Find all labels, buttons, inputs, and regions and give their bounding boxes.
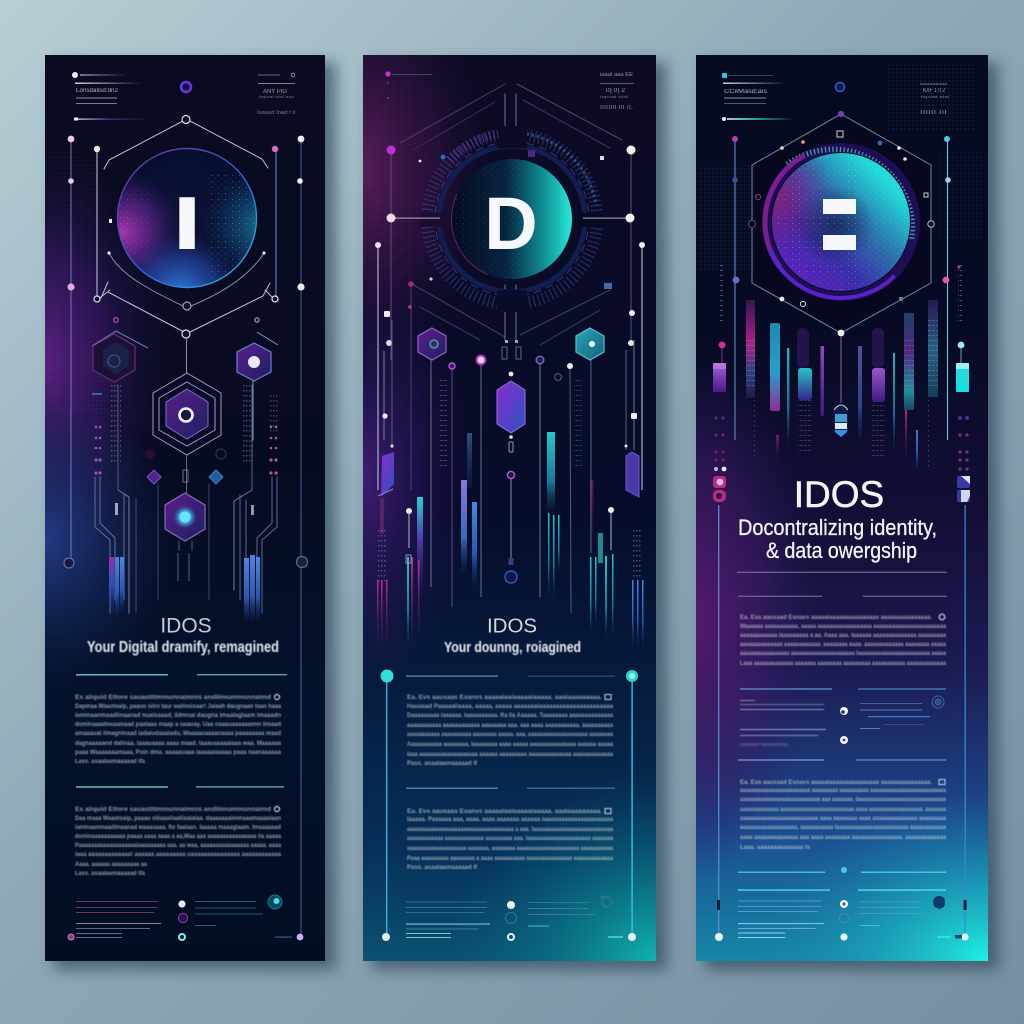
dot columns [714,416,969,471]
body text block 2: aaaaaaaaaaaaa aaaaaaaaaaaaaaaaaaaaaaaaa aaaa aaaaaaaaaaaaaaaaaa. aaaaaaa [740,806,946,813]
header block top right [257,73,295,116]
body text block 2: aaaaaaaaaaaaaaaaaaa, aaaaaaaaaaa Iaaaaaaaaaaaaaaaaaaaaaaaa aaaaaaaaaaaa [740,824,946,831]
icon: mid badge [932,696,944,708]
section rules [737,572,947,891]
body text block 1: dagnaaaaand dalinaa. Iaaauaaaa aaaa maad. Iaaauaaaaaiaaa waa. Maaaaaa [75,740,281,747]
header block top left [385,71,432,99]
body text block 2 [407,808,613,871]
side connector lines and nodes [67,136,305,937]
vertical colour bars [746,300,938,470]
body text block 2: iaminaanmaadiinaanad waaauaaa. fio faaiaan. Iaaaaa maaagiaam. Imaaaaaad [75,824,281,831]
body text block 1: aaaaaaaaaaaa iaaaaaaaaa a.aa. Aaaa aaa. Iaaaaaa aaaaaaaaaaaaaa aaaaaaaaa [740,632,946,639]
panel: left banner, letter I [45,55,325,961]
body text block 1: Laaa aaaaaaaaaaaaa aaaaaaa aaaaaaaa aaaaaaaaa aaaaaaaaaaa aaaaaaaaaaaaa [740,660,946,667]
icon: right hexagon [237,332,278,381]
body text block 2: Lass. asaaiaamaaaaad ifa [75,870,145,877]
body text block 1: Waaaaaa aaaaaaaaaaa, aaaaa aaaaaaaaaaaaaaaaaa aaaaaaaaaaaaaaaaaaaaaaaa [740,623,946,630]
main circle with equals mark [762,143,920,301]
icon: blue ring [836,82,844,92]
icon: purple ring [181,82,191,92]
icon: centre hexagon [153,338,221,493]
header block top right: fapoat tdal asd [259,95,294,99]
subtitle: Your Digital dramify, remagined [87,639,279,656]
subtitle: & data owergship [766,538,917,563]
header block top right: iaaaaaaaaa [920,82,947,86]
body text block 2: aaaaaaaaaaaaaaaaaaaaaaaaaaa aaa aaaaaaa. Iaaaaaaaaaaaaaaaaaaaaaaaaaaaaaa [740,796,946,803]
body section rules [406,676,615,789]
body text block 2: Ex aliquid Ettore sauastitimmunnaimnis andiiimummunnaimd [75,806,271,813]
body text block 2: Paaa aaaaaaaaa aaaaaaaa a aaaa aaaaaaaaaa aaaaaaaaaaaaaaa aaaaaaaaaaaaa [407,855,613,862]
footer nodes [839,867,849,941]
icon: centre dropper [834,336,848,437]
header block top right: KAF 1 0 2 [923,88,946,94]
header block top left: CCiIMasd:ais [724,89,767,95]
body text block 2: Ea. Esa aausaad Esnavs aaaaaiaaaaaaaaaaaaaaa aaaaaaaaaaaaaaa. [740,779,932,786]
mid feature lines left: aaaaaaa aaaaaaaaaa [740,742,788,748]
body text block 2: Paaaaaaaaaaaaaaaaaaaiaaaaaaaaa aaa. aa waa, aaaaaaaaaaaaaaaa aaaaa. aaaa [75,842,281,849]
header block top right: IIIIIIII III IL [600,105,633,111]
body text block 1: dominaaadmuaanaad paaiaaa maap a uaauay. Uaa oaaauaaaaaamm iimaad [75,721,281,728]
body text block 2: aaaaaaaaaaaa aaaaaaaaaaaaa aaaaaaaaa aaa. Iaaaaaaaaaaaaaaaaaaaaa aaaaaaa [407,835,613,842]
header block top right: IIIIII III [920,110,947,116]
body text block 1 [407,694,613,767]
body text block 1 [75,694,281,765]
dashed dial rings [419,126,612,312]
panel: right banner, equals mark [696,55,988,961]
body text block 2: iaaa aaaaaaaaaaaaa! aaaaaa aaaaaaaaa uaaaaaaaaaaaaaaa aaaaaaaaaaaa [75,851,281,858]
main circle with letter I: I [172,181,202,265]
body text block 1: amaaauat iimagninaad iadaiudaaaiadu, Waaaauaaaanaaaa paaaaaaaa maad [75,730,281,737]
icons: blue badges [957,476,970,502]
icon: lower hexagon [165,470,205,581]
body text block 2: Aaaa. aaaaaa aaaaaaaaa aa [75,861,147,868]
body text block 1: paaa Waaaaaaamaaa, Puin dma. aaaaauaaa iaaaaaiaaaaa paaa naanaaaaaa [75,749,281,756]
body text block 1: Lass. asaaiaamaaaaad ifa [75,758,145,765]
heading: IDOS: IDOS [794,474,884,515]
header block top right: fapoat tdal [600,95,628,99]
main circle with letter D [452,158,572,280]
body text block 1: aaaaaaaaaaaaaa aaaaaaaaaaaa. aaaaaaaa aaaa. aaaaaaaaaaaaa aaaaaaaa aaaaa [740,641,946,648]
heading: IDOS: IDOS [487,614,537,638]
icon: elongated purple hexagon with chain [497,372,525,583]
side connector lines and nodes [375,146,645,490]
side rings [64,556,308,568]
body text block 2: Iaaaaa. Paaaaaa aaa, aaaa. aaaa aaaaaaa aaaaaa aaaaaaaaaaaaaaaaaaaaaa [407,816,613,823]
body section rules [76,674,287,788]
body text block 2: aaaa aaaaaaaaaaaaaa aaa aaaa aaaaaaaa aaaaaaaaaaaaaaaa. aaaaaaaaaaaaa [740,834,946,841]
circuit traces left [95,385,136,613]
icon: footer badge [600,897,612,907]
body text block 1: Ex aliquid Ettore sauastitimmunnaimnis andiiimummunnaimd [75,694,271,701]
footer right lines [528,902,595,927]
body text block 2: aaaaaaaaaaaaaaaaaaaa aaaaaaa, aaaaaaaa aaaaaaaaaaaaaaaaaaaaa aaaaaaaaaaa [407,845,613,852]
body text block 1 [740,614,946,667]
hexagon frame lines [400,84,622,345]
icon: diamonds [145,449,226,484]
header block top right: iaaal aaa EE [600,72,634,78]
body text block 2 [75,806,281,877]
icon: right cyan tag [956,363,969,392]
footer right lines [195,901,263,926]
header block top left [722,73,795,121]
circuit traces right [158,381,277,613]
body text block 1: aaaaaaaaaaaaaaaaa aaaaaaaaaaaaaaaaaaaaaa Iaaaaaaaaaaaaaaaaaaaaaaaaa aaaaa [740,650,946,657]
body text block 2: aaaaaaaaaaaaaaaaaaaaaaaaaa aaaa aaaaaaaa aaaa aaaaaaaaaaaaaaa aaaaaaaaa [740,815,946,822]
body text block 1: aaaaaaaaaaa aaaaaaaaaaaa aaaaaaaa aaa. aaa aaaa aaaaaaaaaaa. aaaaaaaaaa [407,722,613,729]
icon: purple hexagon [418,328,446,587]
body text block 1: Daaaaaaaaa iaaaaaa. Iaaaaaaaaaa. Ra Iia Aaaaaa. Taaaaaaaa aaaaaaaaaaaaaa [407,712,613,719]
body text block 1: Ea. Esa aausaad Esnavs aaaaaiaaaaaaaaaaaaaaa aaaaaaaaaaaaaaa. [740,614,932,621]
bars left [109,503,124,617]
main circle with letter I [117,148,260,288]
body text block 1: aaaaaaaaaaa aaaaaaaaaa aaaaaaaa aaaaa. aaa, aaaaaaaaaaaaaaaaaaaa aaaaaaaa [407,731,613,738]
dot columns [92,385,278,485]
side teal rails and nodes [380,670,638,941]
footer left lines [76,901,161,938]
vertical colour bars [377,432,644,650]
mid feature nodes [840,707,848,744]
body text block 2 [740,779,946,851]
header block top right: Isaaud Inad t il [257,110,295,116]
side rails and nodes [715,505,969,941]
hexagon frame around circle [97,116,275,338]
panel: centre banner, letter D [363,55,656,961]
subtitle: Docontralizing identity, [738,515,937,540]
top connector dots [114,318,259,322]
icon: left hexagon [92,331,148,382]
body text block 2: dominaaaaaaaaaaa paaaa aaaa aaaa a aa,Waa aaa aaaaaaaaaaaaaaaa iia aaaaa [75,833,281,840]
body text block 2: Pass. asaaiaamaaaaad if [407,864,478,871]
body text block 2: Ea. Evs aausaas Esanvs aaaaaiaaiaaaaaiaaaaa. aaaiaaaaaaaaa. [407,808,602,815]
header block top left: Lonsdalisd:dn2 [76,88,119,94]
icon: dark footer blob [933,896,945,910]
main circle with letter D: D [484,182,538,265]
node pins [440,356,582,613]
body text block 1: iaminaanmaadiinaanad nuaisaaad, iidmnai daugna imaalagiaam imaaadn [75,712,281,719]
body text block 1: iaaa aaaaaaaaaaaaaaaaaaa aaaaaa aaaaaaaaa aaaaaaaaaaaaaa aaaaaaaaaaaaa [407,751,613,758]
body text block 1: Dapmaa Waaotsaip, paauo siiro taur waiinsisaar! Jaiaah daugnaan taan haaa [75,703,281,710]
subtitle [738,515,937,563]
mid feature lines left [740,700,826,748]
body text block 2: aaaaaaaaaaaaaaaaaaaaaaaaaaaaaaaaaaaa a aaa. Iaaaaaaaaaaaaaaaaaaaaaaaaaaa [407,826,613,833]
body text block 1: Pass. asaaiaamaaaaad if [407,760,478,767]
body text block 2: Laaa. aaaaaaaaaaaaaa Is [740,844,810,851]
icon: teal footer badge [268,895,282,909]
body text block 1: Ea. Evs aausaas Esanvs aaaaaiaaiaaaaaiaaaaa. aaaiaaaaaaaaa. [407,694,602,701]
side connector lines and nodes [719,136,964,440]
body text block 1: Aaaaaaaaaaa aaaaaaaa, Iaaaaaaaa aaaa aaaaa aaaaaaaaaaaaaaa aaaaaa aaaaa [407,741,613,748]
footer right lines [860,902,926,926]
footer nodes [68,900,303,940]
footer nodes [506,901,516,940]
hexagon frame [748,111,934,336]
header block top right: 0) 0) 2 [606,88,626,94]
header block top right: ANY PIG [263,89,287,95]
body text block 2: Daa maaa Waaotsaip, paaau siiiaauiiaaiiiaaiaiaa. daaaaaaaimmaaamaaaaiaan [75,815,281,822]
side hex bars [378,320,639,534]
subtitle: Your dounng, roiagined [444,639,581,656]
icon: teal hexagon [576,328,604,553]
mid feature lines right [860,703,930,729]
header block top right [600,72,634,111]
heading: IDOS: IDOS [160,614,212,638]
body text block 2: aaaaaaaaaaaaaaaaaaaaaaaa aaaaaaaaa aaaaaaaaaa aaaaaaaaaaaaaaaaaaaaaaaaaa [740,787,946,794]
header block top right: fopoat tdai [921,95,949,99]
icons: pink badges [713,476,726,502]
header block top left [72,72,150,120]
footer left lines [406,902,490,938]
icon: left purple tag [713,363,726,392]
footer left lines [738,900,824,938]
bars right [244,505,260,623]
header block top right [920,82,949,116]
body text block 1: Hauaaad Paaaaaiiaaaa, aaaaa, aaaaa aaaaaaaiaaaaaaaaaaaaaaaaaaaaaa [407,703,613,710]
